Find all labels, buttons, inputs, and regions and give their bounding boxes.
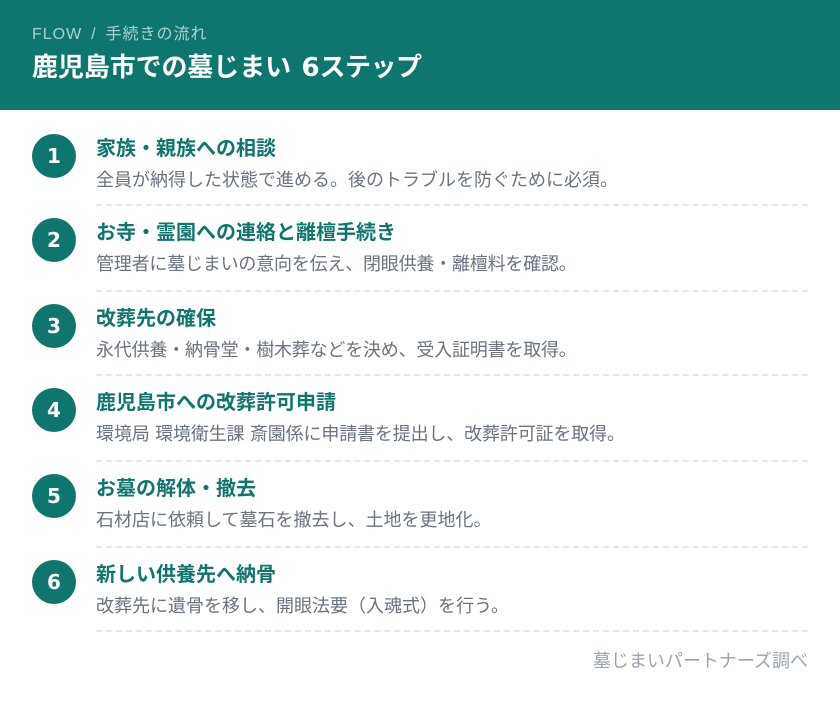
step 6 — [32, 560, 509, 617]
step 2 description: 管理者に墓じまいの意向を伝え、閉眼供養・離檀料を確認。 — [96, 254, 577, 275]
step number 1: 1 — [47, 144, 61, 168]
source note: 墓じまいパートナーズ調べ — [593, 651, 808, 672]
step 1 — [32, 134, 618, 191]
step 2 — [32, 218, 577, 275]
step 3 heading: 改葬先の確保 — [96, 306, 216, 330]
step number 6 — [32, 560, 76, 604]
step number 2 — [32, 218, 76, 262]
step 4 heading: 鹿児島市への改葬許可申請 — [96, 390, 336, 414]
step number 1 — [32, 134, 76, 178]
step 6 heading: 新しい供養先へ納骨 — [96, 562, 276, 586]
step 5 — [32, 474, 491, 531]
step 3 description: 永代供養・納骨堂・樹木葬などを決め、受入証明書を取得。 — [96, 340, 577, 361]
eyebrow label: FLOW / 手続きの流れ — [32, 26, 208, 43]
step number 6: 6 — [47, 570, 61, 594]
step number 5 — [32, 474, 76, 518]
step 5 description: 石材店に依頼して墓石を撤去し、土地を更地化。 — [96, 510, 491, 531]
step 2 heading: お寺・霊園への連絡と離檀手続き — [96, 220, 396, 244]
step number 4 — [32, 388, 76, 432]
step 4 description: 環境局 環境衛生課 斎園係に申請書を提出し、改葬許可証を取得。 — [96, 424, 625, 445]
step 1 description: 全員が納得した状態で進める。後のトラブルを防ぐために必須。 — [96, 170, 618, 191]
step 3 — [32, 304, 577, 361]
title: 鹿児島市での墓じまい 6ステップ — [32, 53, 421, 83]
step number 3: 3 — [47, 314, 61, 338]
step number 2: 2 — [47, 228, 61, 252]
step number 3 — [32, 304, 76, 348]
header band — [0, 0, 840, 110]
step 5 heading: お墓の解体・撤去 — [96, 476, 256, 500]
step 1 heading: 家族・親族への相談 — [96, 136, 276, 160]
step number 5: 5 — [47, 484, 61, 508]
step 4 — [32, 388, 625, 445]
step number 4: 4 — [47, 398, 61, 422]
step 6 description: 改葬先に遺骨を移し、開眼法要（入魂式）を行う。 — [96, 596, 509, 617]
